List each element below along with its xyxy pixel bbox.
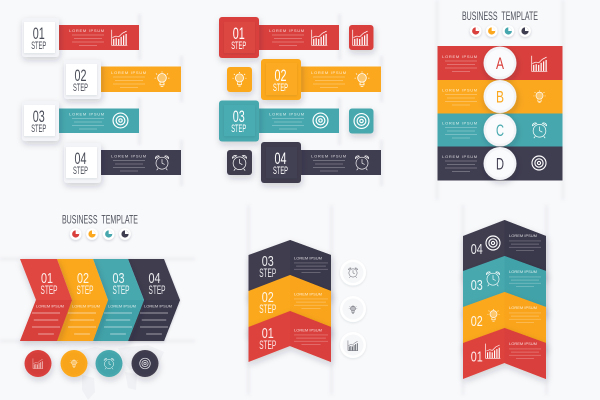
icon circle: target bbox=[132, 350, 158, 377]
band: step 02 bbox=[248, 275, 331, 336]
badge: C bbox=[484, 114, 516, 146]
row: step 03: LOREM IPSUM bbox=[269, 112, 305, 116]
legend dots bbox=[470, 25, 531, 37]
band: step 03 bbox=[463, 256, 546, 316]
row: step 02: LOREM IPSUM bbox=[111, 70, 147, 75]
chevron: step 04: STEP bbox=[148, 283, 166, 297]
row: step 03: 03 bbox=[233, 108, 245, 126]
icon circle: chart bbox=[340, 332, 366, 358]
chevron: step 04: 04 bbox=[148, 270, 160, 287]
band: B: LOREM IPSUM bbox=[442, 88, 478, 92]
row: step 01 bbox=[22, 18, 139, 57]
band: step 03: STEP bbox=[259, 266, 276, 280]
chevron: step 01: STEP bbox=[40, 283, 58, 297]
band: step 01: 01 bbox=[262, 325, 274, 342]
row: step 02: LOREM IPSUM bbox=[311, 70, 347, 75]
band: A bbox=[438, 46, 562, 80]
row: step 04 bbox=[64, 143, 181, 183]
chevron: step 01: LOREM IPSUM bbox=[36, 304, 64, 308]
band: step 04 bbox=[463, 220, 546, 280]
row: step 02: 02 bbox=[274, 67, 286, 85]
badge: C: C bbox=[496, 121, 504, 140]
row: step 01: STEP bbox=[31, 40, 46, 52]
band: C: LOREM IPSUM bbox=[442, 120, 478, 126]
row: step 03 bbox=[22, 101, 139, 141]
row: step 02 bbox=[261, 59, 381, 100]
chevron: step 02: LOREM IPSUM bbox=[72, 304, 100, 308]
row: step 04: LOREM IPSUM bbox=[111, 154, 147, 158]
icon circle: clock bbox=[96, 350, 122, 377]
row: step 04: LOREM IPSUM bbox=[311, 154, 347, 158]
row: step 01: LOREM IPSUM bbox=[69, 28, 105, 33]
band: step 01: LOREM IPSUM bbox=[294, 328, 322, 332]
badge: B bbox=[484, 80, 516, 113]
band: step 02: LOREM IPSUM bbox=[294, 292, 322, 296]
icon circle: bulb bbox=[340, 296, 366, 322]
row: step 04: STEP bbox=[73, 165, 88, 177]
chevron: step 02 bbox=[57, 259, 108, 341]
band: step 02: LOREM IPSUM bbox=[509, 305, 537, 310]
row: step 01: 01 bbox=[233, 25, 245, 43]
row: step 01 bbox=[219, 17, 339, 58]
row: step 03: 03 bbox=[33, 108, 45, 126]
panel: four steps with white boxes bbox=[22, 14, 182, 186]
world map bbox=[72, 345, 164, 400]
band: step 01 bbox=[248, 311, 331, 362]
row: step 01: LOREM IPSUM bbox=[269, 28, 305, 33]
row: step 03: STEP bbox=[231, 123, 246, 135]
band: D bbox=[438, 146, 562, 180]
badge: D: D bbox=[496, 154, 504, 174]
chevron: step 04 bbox=[128, 259, 180, 341]
chevron: step 04: LOREM IPSUM bbox=[144, 304, 172, 308]
icon: side clock bbox=[227, 150, 252, 175]
row: step 04 bbox=[261, 142, 381, 183]
panel: horizontal chevrons bbox=[0, 214, 195, 400]
heading: BUSINESS TEMPLATE bbox=[462, 11, 538, 23]
badge: A: A bbox=[496, 54, 504, 73]
icon circle: clock bbox=[340, 260, 366, 286]
band: step 01: 01 bbox=[471, 348, 483, 366]
icon circle: bulb bbox=[60, 350, 88, 377]
row: step 03 bbox=[219, 100, 339, 142]
badge: B: B bbox=[496, 88, 504, 106]
row: step 04: STEP bbox=[273, 165, 288, 177]
row: step 02 bbox=[64, 60, 181, 99]
panel: upward chevrons 04 to 01 with inline icons bbox=[463, 205, 546, 395]
band: step 04: 04 bbox=[471, 241, 483, 258]
panel: four steps with coloured boxes and side icons bbox=[219, 14, 382, 186]
badge: D bbox=[484, 147, 516, 180]
row: step 02: 02 bbox=[74, 67, 86, 85]
chevron: step 02: 02 bbox=[77, 270, 89, 287]
band: step 02: 02 bbox=[471, 313, 483, 330]
band: D: LOREM IPSUM bbox=[442, 154, 478, 159]
band: step 03: LOREM IPSUM bbox=[294, 256, 322, 260]
icon: side bulb bbox=[227, 67, 252, 92]
band: step 01 bbox=[463, 328, 546, 379]
row: step 01: STEP bbox=[231, 40, 246, 52]
band: step 03: 03 bbox=[262, 253, 274, 270]
row: step 03: STEP bbox=[31, 123, 46, 135]
band: step 02: STEP bbox=[259, 302, 276, 316]
band: step 04: LOREM IPSUM bbox=[509, 233, 537, 238]
icon: side target bbox=[349, 108, 374, 134]
chevron: step 02: STEP bbox=[76, 283, 94, 297]
band: step 01: LOREM IPSUM bbox=[509, 341, 537, 346]
band: A: LOREM IPSUM bbox=[442, 54, 478, 59]
chevron: step 03: STEP bbox=[112, 283, 130, 297]
chevron: step 03 bbox=[93, 259, 144, 341]
band: C bbox=[438, 114, 562, 146]
row: step 02: STEP bbox=[73, 82, 88, 94]
row: step 01: 01 bbox=[33, 25, 45, 43]
legend dots bbox=[70, 228, 131, 240]
band: step 01: STEP bbox=[259, 338, 276, 352]
band: step 03 bbox=[248, 240, 331, 300]
chevron: step 01 bbox=[20, 259, 72, 341]
icon circle: chart bbox=[24, 350, 52, 377]
chevron: step 03: LOREM IPSUM bbox=[108, 304, 136, 308]
row: step 04: 04 bbox=[274, 150, 286, 168]
icon: side chart bbox=[349, 25, 374, 50]
band: step 02: 02 bbox=[262, 289, 274, 306]
row: step 04: 04 bbox=[74, 150, 86, 168]
panel: upward chevrons 03 to 01 with side icons bbox=[248, 205, 366, 395]
band: B bbox=[438, 80, 562, 114]
heading: BUSINESS TEMPLATE bbox=[62, 214, 138, 226]
row: step 02: STEP bbox=[273, 82, 288, 94]
band: step 03: 03 bbox=[471, 277, 483, 294]
panel: business template A B C D bbox=[437, 0, 563, 200]
badge: A bbox=[484, 46, 516, 80]
band: step 03: LOREM IPSUM bbox=[509, 269, 537, 274]
row: step 03: LOREM IPSUM bbox=[69, 112, 105, 116]
band: step 02 bbox=[463, 292, 546, 352]
chevron: step 01: 01 bbox=[41, 270, 53, 287]
chevron: step 03: 03 bbox=[112, 270, 124, 287]
